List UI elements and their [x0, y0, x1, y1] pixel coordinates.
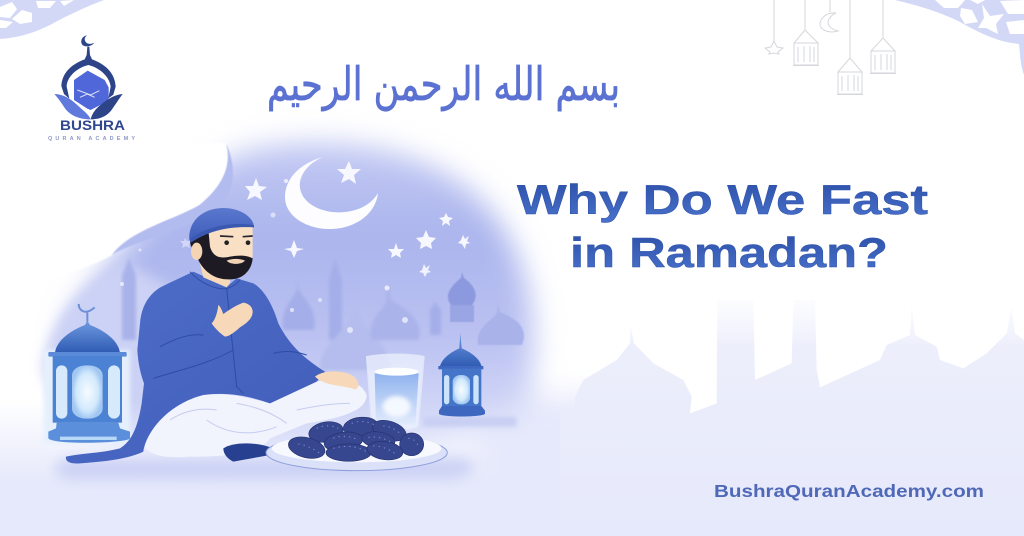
main title	[517, 176, 928, 276]
ear	[191, 243, 202, 260]
lantern crescent finial	[79, 304, 95, 322]
moon and stars	[120, 157, 470, 333]
star field	[120, 161, 470, 333]
knee hand	[315, 371, 358, 389]
lantern dome	[55, 321, 120, 353]
eyes	[224, 240, 229, 245]
logo wordmark: BUSHRA	[60, 118, 125, 133]
logo crescent	[81, 35, 95, 46]
top-right corner ornament	[895, 0, 1024, 75]
logo: Bushra Quran Academy	[48, 35, 135, 142]
small lantern	[423, 333, 517, 427]
mouth highlight	[227, 259, 245, 264]
swoosh band	[112, 143, 233, 255]
left floor wash	[0, 400, 560, 536]
hanging lantern one	[793, 0, 819, 66]
blue robe	[66, 272, 325, 463]
Arabic calligraphy heading: بسم الله الرحمن الرحيم	[267, 57, 620, 112]
logo arch panel	[74, 71, 109, 110]
dark foot	[223, 443, 273, 462]
left faded mosque	[122, 258, 136, 340]
lantern body	[53, 356, 122, 423]
right skyline silhouette	[560, 300, 1024, 536]
top-left corner ornament	[0, 0, 104, 39]
main title: in Ramadan?	[570, 229, 888, 276]
dates	[286, 416, 424, 462]
centre mosque domes	[283, 258, 441, 370]
hair and beard	[190, 229, 253, 279]
crescent moon	[285, 157, 378, 229]
domed mosque right	[448, 272, 524, 345]
logo tagline: QURAN ACADEMY	[48, 136, 135, 142]
website URL: BushraQuranAcademy.com	[714, 481, 984, 501]
neck	[200, 263, 230, 287]
main title: Why Do We Fast	[517, 176, 928, 223]
hanging lantern three	[870, 0, 896, 74]
plate	[266, 435, 447, 471]
mosque silhouettes behind the man	[122, 258, 524, 370]
eyebrows	[220, 233, 253, 239]
hanging crescent	[820, 0, 838, 32]
hand on chest	[212, 303, 253, 337]
logo right hand	[91, 94, 123, 119]
glass of water	[367, 354, 424, 430]
floor blend under the skyline edge	[480, 395, 640, 536]
plate of dates	[266, 416, 447, 471]
logo open book	[77, 90, 99, 97]
white cut-out above swoosh	[20, 143, 228, 280]
scene: night sky wash	[20, 142, 534, 480]
white trousers	[145, 379, 367, 457]
date highlights	[298, 422, 418, 455]
large blue lantern	[43, 304, 130, 443]
logo left hand	[54, 94, 91, 119]
face	[203, 227, 253, 273]
seated man	[66, 208, 367, 463]
lantern base	[48, 423, 130, 443]
hanging lanterns and decorations	[765, 0, 896, 94]
logo dome	[61, 47, 116, 99]
hanging star	[765, 0, 783, 54]
prayer cap	[189, 208, 254, 240]
hanging lantern two	[837, 0, 863, 94]
